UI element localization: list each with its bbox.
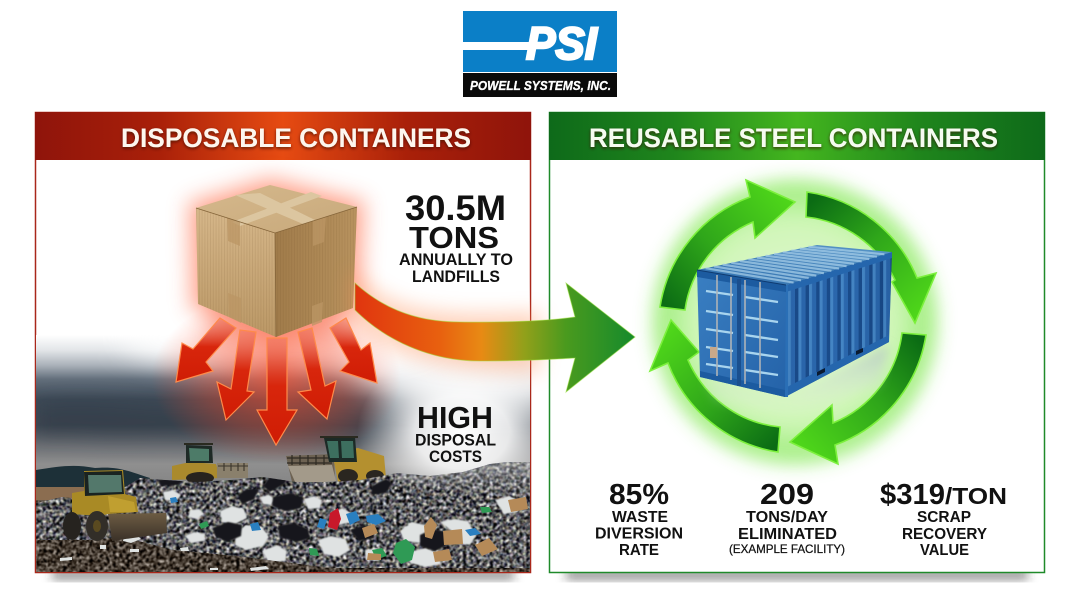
distant hills	[36, 466, 150, 490]
cycle arrow: top left	[660, 180, 795, 310]
arrow: disposable to reusable	[355, 283, 635, 392]
trash: black bags	[158, 469, 449, 551]
callout: 30.5M tons: TONS	[409, 220, 499, 255]
cycle arrow: top right	[806, 192, 936, 323]
garbage pile	[36, 462, 530, 568]
stat: $319/ton scrap recovery value: SCRAP	[917, 509, 971, 526]
stat: $319/ton scrap recovery value: $319	[880, 479, 945, 511]
stat: 209 tons/day eliminated: 209	[760, 479, 814, 511]
dirt ground	[36, 500, 530, 573]
bulldozer: back left	[172, 444, 248, 484]
stat: 85% waste diversion rate: WASTE	[612, 509, 668, 526]
callout: 30.5M tons: ANNUALLY TO	[399, 250, 513, 269]
container doors	[697, 270, 786, 397]
icon: cardboard box	[196, 185, 357, 337]
stat: $319/ton scrap recovery value	[880, 479, 1007, 559]
trash: green and red items	[199, 507, 492, 564]
trash: cardboard	[362, 497, 528, 562]
header: reusable steel containers: REUSABLE STEEL CONTAINERS	[589, 123, 998, 153]
litter on ground	[60, 534, 269, 571]
logo: Powell Systems, Inc.	[463, 11, 617, 97]
header: disposable containers: DISPOSABLE CONTAINERS	[121, 123, 471, 153]
container right side	[785, 252, 892, 397]
callout: 30.5M tons: LANDFILLS	[412, 267, 500, 286]
arrow: right	[298, 328, 336, 419]
header: reusable steel containers	[549, 112, 1045, 160]
arrow: left	[217, 330, 256, 420]
stat: 85% waste diversion rate: RATE	[619, 542, 659, 559]
stat: 209 tons/day eliminated: ELIMINATED	[738, 526, 837, 543]
glow behind cardboard box	[196, 185, 357, 345]
stat: 85% waste diversion rate	[595, 479, 683, 559]
bulldozer: back right	[286, 437, 386, 484]
packing tape	[232, 192, 322, 226]
arrow: far left	[176, 318, 236, 382]
panel: disposable containers	[34, 112, 532, 574]
bulldozer: front loader	[63, 470, 167, 541]
glow behind recycling arrows	[645, 172, 945, 472]
stat: $319/ton scrap recovery value: /TON	[945, 483, 1007, 509]
glow behind big arrow	[352, 268, 540, 372]
panel shadows	[52, 571, 1028, 579]
icon: circular reuse arrows	[650, 180, 936, 464]
stat: 209 tons/day eliminated: TONS/DAY	[746, 509, 828, 526]
stat: 85% waste diversion rate: DIVERSION	[595, 526, 683, 542]
stat: 209 tons/day eliminated	[729, 479, 845, 556]
trash: white bags	[163, 490, 521, 567]
stat: $319/ton scrap recovery value: RECOVERY	[902, 526, 987, 543]
panel: reusable steel containers	[549, 112, 1045, 572]
callout: high disposal costs: COSTS	[429, 447, 482, 466]
callout: high disposal costs	[415, 400, 496, 466]
cycle arrow: bottom right	[790, 333, 926, 464]
icon: falling red arrows	[176, 318, 377, 445]
trash: blue items	[170, 497, 481, 536]
logo: Powell Systems, Inc.: PSI	[526, 18, 598, 69]
logo: Powell Systems, Inc.: POWELL SYSTEMS, INC.	[470, 78, 611, 93]
stat: $319/ton scrap recovery value: VALUE	[920, 542, 969, 559]
callout: 30.5M tons: 30.5M	[405, 189, 506, 228]
callout: high disposal costs: HIGH	[417, 400, 493, 435]
container reflection	[705, 345, 889, 418]
icon: blue shipping container	[697, 245, 892, 418]
header: disposable containers	[35, 112, 531, 160]
cycle arrow: bottom left	[650, 320, 780, 452]
callout: 30.5M tons	[399, 189, 513, 286]
stat: 85% waste diversion rate: 85%	[609, 479, 669, 511]
arrow: centre	[257, 338, 297, 445]
landfill scene	[36, 284, 530, 572]
stat: 209 tons/day eliminated: (EXAMPLE FACILITY)	[729, 542, 845, 556]
callout: high disposal costs: DISPOSAL	[415, 430, 496, 450]
arrow: far right	[330, 318, 377, 383]
container top	[697, 245, 892, 285]
